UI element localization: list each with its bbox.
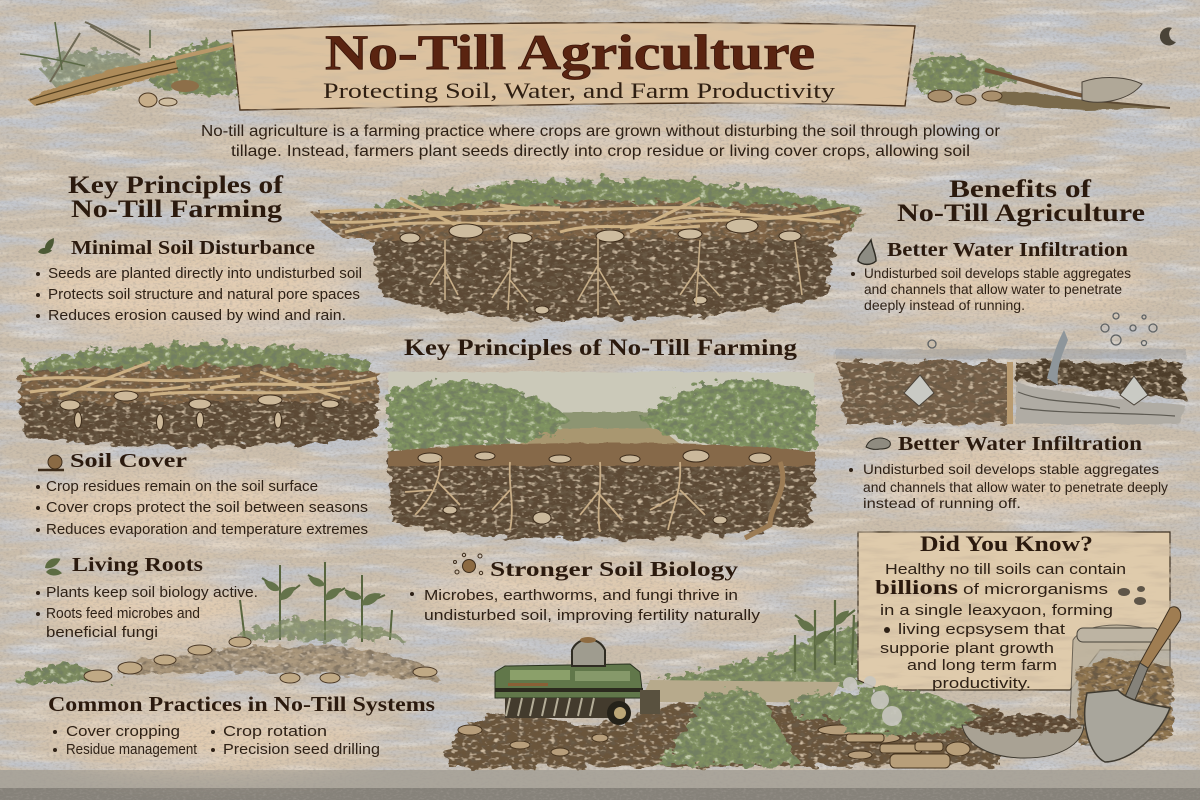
icon: snail shell <box>38 455 64 470</box>
intro paragraph: No-till agriculture is a farming practice where crops are grown without disturbing the soil through plowing or <box>201 123 1001 140</box>
panel: living roots <box>36 554 258 641</box>
bullet list: Roots feed microbes and <box>46 605 200 622</box>
description <box>851 265 1131 313</box>
fact text: of microrganisms <box>963 581 1108 598</box>
icon: soil crumbs <box>1118 586 1146 605</box>
description <box>849 461 1168 511</box>
subtitle: Protecting Soil, Water, and Farm Productivity <box>323 78 835 103</box>
fact text: Healthy no till soils can contain <box>885 561 1126 578</box>
bullet list: beneficial fungi <box>46 624 158 641</box>
bullet list: Crop residues remain on the soil surface <box>46 478 318 495</box>
bullet list: Reduces evaporation and temperature extremes <box>46 521 368 538</box>
heading: Better Water Infiltration <box>898 433 1142 455</box>
illustration: top centre soil cross-section <box>312 179 865 318</box>
icon: microbe <box>454 553 483 575</box>
fact text: in a single leaxyɑon, forming <box>880 602 1113 619</box>
intro paragraph <box>201 123 1001 160</box>
description: and channels that allow water to penetrate <box>864 281 1122 297</box>
illustration: bottom field ground <box>445 600 1000 768</box>
fact text <box>875 561 1126 692</box>
description: Microbes, earthworms, and fungi thrive in <box>424 587 738 604</box>
bullet list <box>36 584 258 641</box>
practices list: Crop rotation <box>223 723 327 740</box>
panel: key principles column heading: Key Principles of <box>68 172 284 199</box>
illustration: right corner plants and trowel <box>915 27 1176 110</box>
illustration: left soil strip with residue <box>18 344 380 446</box>
icon: leaves <box>43 556 63 577</box>
panel: soil cover <box>36 450 368 538</box>
fact text: and long term farm <box>907 657 1057 674</box>
heading: Minimal Soil Disturbance <box>71 237 315 259</box>
panel: better water infiltration 2 <box>849 433 1168 511</box>
panel: did you know callout <box>858 531 1170 692</box>
icon: stone <box>866 438 890 449</box>
description: and channels that allow water to penetrate deeply <box>863 479 1168 495</box>
practices list: Precision seed drilling <box>223 741 380 758</box>
illustration: seed drill machine <box>495 637 660 725</box>
panel: key principles column heading <box>68 172 284 223</box>
practices list: Residue management <box>66 741 198 758</box>
heading: centre key principles: Key Principles of No-Till Farming <box>404 335 798 360</box>
bullet list: Seeds are planted directly into undisturbed soil <box>48 265 362 282</box>
fact text: billions <box>875 577 958 599</box>
heading: Better Water Infiltration <box>887 239 1128 261</box>
bullet list: Reduces erosion caused by wind and rain. <box>48 307 346 324</box>
illustration: left corner residue bundle <box>20 22 240 107</box>
description: Undisturbed soil develops stable aggregates <box>863 461 1159 477</box>
bullet list: Plants keep soil biology active. <box>46 584 258 601</box>
intro paragraph: tillage. Instead, farmers plant seeds directly into crop residue or living cover crops, allowing soil <box>231 143 970 160</box>
illustration: flowers, logs, bowl, jar and trowel <box>842 607 1181 768</box>
description: deeply instead of running. <box>864 297 1025 313</box>
description: instead of running off. <box>863 495 1021 511</box>
icon: water drop <box>858 240 876 264</box>
panel: benefits column heading: No-Till Agriculture <box>897 200 1145 227</box>
bullet list: Protects soil structure and natural pore spaces <box>48 286 360 303</box>
title: No-Till Agriculture <box>325 24 815 80</box>
panel: key principles column heading: No-Till Farming <box>71 196 283 223</box>
description: undisturbed soil, improving fertility naturally <box>424 607 761 624</box>
heading: Stronger Soil Biology <box>490 557 739 581</box>
heading: Living Roots <box>72 554 203 576</box>
description <box>410 587 761 624</box>
bullet list <box>36 265 362 324</box>
panel: benefits column heading: Benefits of <box>949 176 1092 203</box>
panel: stronger soil biology <box>410 553 761 624</box>
bullet list: Cover crops protect the soil between seasons <box>46 499 368 516</box>
illustration: water infiltration cross-section <box>836 313 1186 424</box>
panel: minimal soil disturbance <box>36 236 362 324</box>
heading: Did You Know? <box>920 531 1093 556</box>
illustration: left plants and rocky path <box>15 562 440 683</box>
title banner <box>232 23 915 110</box>
bullet list <box>36 478 368 538</box>
fact text: productivity. <box>932 675 1031 692</box>
icon: leaf sprig <box>38 236 57 254</box>
description: Undisturbed soil develops stable aggregates <box>864 265 1131 281</box>
panel: benefits column heading <box>897 176 1145 227</box>
panel: common practices <box>48 692 435 758</box>
heading: Soil Cover <box>70 450 187 472</box>
fact text: living ecpsysem that <box>898 621 1066 638</box>
fact text: supporie plant growth <box>880 640 1054 657</box>
practices list: Cover cropping <box>66 723 180 740</box>
illustration: central soil and crop scene <box>388 372 815 539</box>
practices list <box>53 723 380 758</box>
panel: better water infiltration 1 <box>851 239 1131 313</box>
heading: Common Practices in No-Till Systems <box>48 692 435 716</box>
